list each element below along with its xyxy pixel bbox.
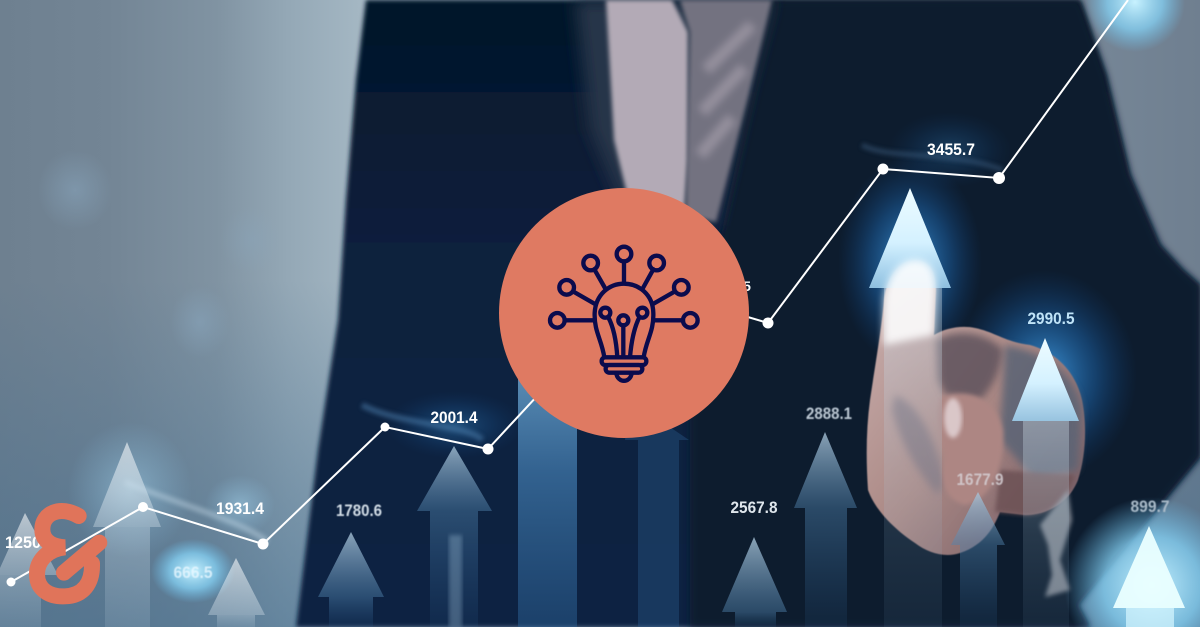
brand ampersand logo xyxy=(37,511,99,596)
label 1780.6: 1780.6 xyxy=(336,501,382,520)
label 1931.4: 1931.4 xyxy=(216,499,264,518)
right suit darker tone xyxy=(690,0,1200,627)
arrow xyxy=(1113,526,1185,627)
arrow behind circle xyxy=(518,370,577,627)
arrow xyxy=(722,537,787,627)
arrow xyxy=(208,558,265,627)
arrow xyxy=(1012,338,1079,627)
shirt xyxy=(575,0,772,225)
arrow xyxy=(318,532,384,627)
label 2990.5: 2990.5 xyxy=(1028,309,1074,328)
arrow xyxy=(417,446,492,627)
hand pointing xyxy=(867,260,1085,597)
label 1677.9: 1677.9 xyxy=(956,470,1004,489)
arrow xyxy=(93,442,161,627)
growth arrows xyxy=(0,188,1185,627)
arrow xyxy=(794,432,857,627)
fingertip highlight xyxy=(884,260,936,345)
label 3455.7: 3455.7 xyxy=(927,140,975,159)
curled finger xyxy=(938,394,1003,505)
network nodes xyxy=(550,247,698,328)
label 1250: 1250 xyxy=(5,533,41,552)
arrow xyxy=(0,513,58,627)
businessman in dark suit xyxy=(296,0,1200,627)
bulb base xyxy=(602,357,646,381)
label 2567.8: 2567.8 xyxy=(730,498,778,517)
icon: lightbulb with network nodes xyxy=(550,247,698,381)
shirt cuff xyxy=(1040,490,1072,597)
label 2001.4: 2001.4 xyxy=(430,408,478,427)
arrow with finger xyxy=(869,188,951,627)
label partial 5: 5 xyxy=(743,278,751,294)
filaments xyxy=(600,308,647,357)
arrow xyxy=(951,492,1005,627)
central coral circle xyxy=(499,188,749,438)
hand shading xyxy=(936,333,1003,400)
data labels xyxy=(5,140,1170,582)
label 2888.1: 2888.1 xyxy=(806,404,852,423)
label 899.7: 899.7 xyxy=(1130,497,1170,516)
blurred line shadows xyxy=(125,145,1003,542)
tie xyxy=(680,0,772,222)
arrow behind circle xyxy=(625,400,689,627)
label 666.5: 666.5 xyxy=(174,563,212,582)
bulb outline xyxy=(595,284,653,357)
suit jacket xyxy=(296,0,1200,627)
